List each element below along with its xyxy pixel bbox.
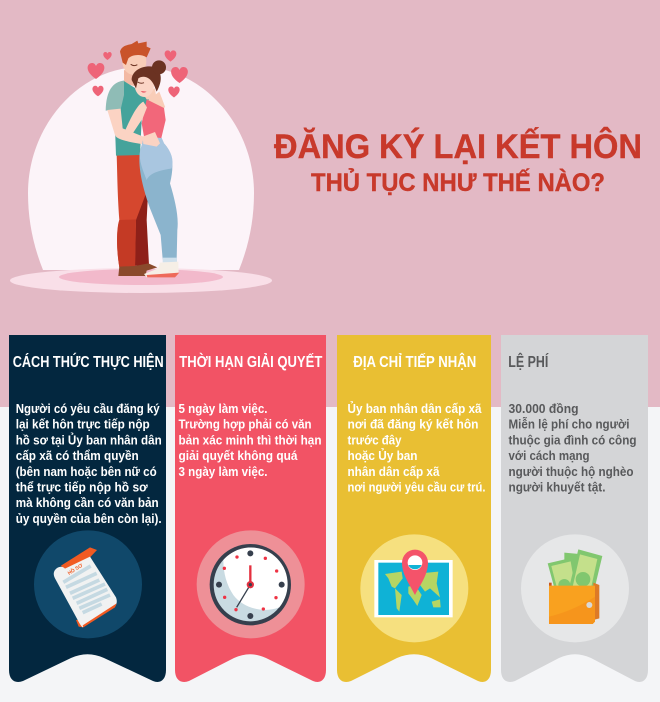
panel 4 body text: thuộc gia đình có công (508, 432, 637, 447)
panel 1 heading: CÁCH THỨC THỰC HIỆN (13, 353, 164, 371)
panel 1 ribbon (9, 335, 166, 682)
panel 4 body text (508, 401, 637, 494)
inner floor shadow (59, 269, 223, 285)
panel 2 body text: 5 ngày làm việc. (178, 401, 268, 416)
hearts (88, 50, 188, 97)
panel 1 body text: ủy quyền của bên còn lại). (16, 511, 162, 526)
panel 1 body text: Người có yêu cầu đăng ký (16, 401, 160, 416)
panel 2 body text: 3 ngày làm việc. (178, 464, 268, 479)
panel 4 ribbon (501, 335, 648, 682)
panel 3 body text (348, 401, 486, 494)
panel 1 body text: (bên nam hoặc bên nữ có (16, 464, 157, 479)
panel 4 body text: Miễn lệ phí cho người (508, 417, 630, 432)
icon: clock (197, 530, 305, 638)
couple figures (106, 41, 179, 277)
panel 3 ribbon (337, 335, 491, 682)
icon: map with pin (360, 534, 468, 642)
panel 2 ribbon (175, 335, 326, 682)
panel 3 body text: trước đây (348, 432, 402, 447)
panel 3 body text: hoặc Ủy ban (348, 448, 418, 463)
panel 1 body text: hồ sơ tại Ủy ban nhân dân (16, 432, 162, 447)
pink header background (0, 0, 660, 407)
panel 2 body text: giải quyết không quá (178, 448, 298, 463)
panel 1 body text: mà không cần có văn bản (16, 495, 159, 510)
panel 1 body text: lại kết hôn trực tiếp nộp (16, 417, 150, 432)
panel 2 body text (178, 401, 322, 479)
panel 3 heading: ĐỊA CHỈ TIẾP NHẬN (353, 353, 476, 371)
panel 4 body text: với cách mạng (508, 448, 590, 463)
floor ellipse (10, 268, 272, 293)
panel 2 body text: bản xác minh thì thời hạn (178, 432, 322, 447)
panel 4 body text: người thuộc hộ nghèo (508, 464, 634, 479)
panel 2 body text: Trường hợp phải có văn (178, 417, 312, 432)
panel 2 heading: THỜI HẠN GIẢI QUYẾT (179, 353, 323, 371)
panel: cách thức thực hiện (9, 335, 166, 682)
panel 4 heading: LỆ PHÍ (508, 353, 549, 371)
panel 3 body text: nơi người yêu cầu cư trú. (348, 480, 486, 494)
panel 3 body text: nhân dân cấp xã (348, 464, 440, 479)
icon: document scroll (34, 530, 142, 638)
title line 1: ĐĂNG KÝ LẠI KẾT HÔN (274, 127, 642, 166)
panel 1 body text: cấp xã có thẩm quyền (16, 448, 139, 463)
panel 3 body text: nơi đã đăng ký kết hôn (348, 417, 479, 432)
panel: địa chỉ tiếp nhận (337, 335, 491, 682)
panel 4 body text: 30.000 đồng (508, 401, 579, 416)
title line 2: THỦ TỤC NHƯ THẾ NÀO? (311, 167, 605, 197)
icon: wallet with banknotes (521, 534, 629, 642)
illustration: hugging couple (10, 41, 272, 293)
panel 4 body text: người khuyết tật. (508, 480, 606, 494)
lower light background (0, 407, 660, 702)
panel: thời hạn giải quyết (175, 335, 326, 682)
white dome (28, 67, 254, 270)
panel: lệ phí (501, 335, 648, 682)
panel 1 body text (16, 401, 162, 526)
panel 3 body text: Ủy ban nhân dân cấp xã (348, 401, 482, 416)
icon: document scroll: HỒ SƠ (66, 562, 85, 577)
title (274, 127, 642, 197)
panel 1 body text: thể trực tiếp nộp hồ sơ (16, 480, 148, 494)
